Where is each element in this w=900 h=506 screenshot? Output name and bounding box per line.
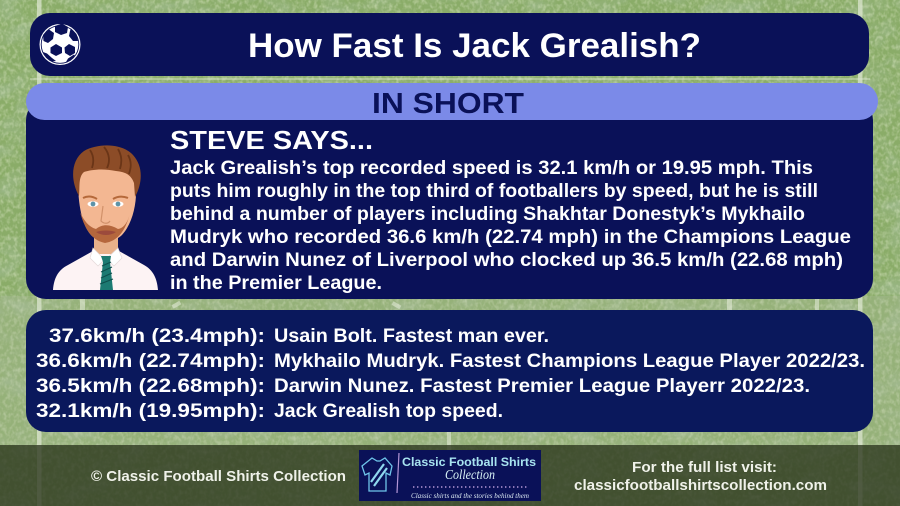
- row: Usain Bolt: Usain Bolt. Fastest man ever.: [274, 325, 549, 347]
- text block: summary paragraph: [170, 157, 851, 294]
- logo: Classic Football Shirts Collection: Collection: [445, 467, 495, 482]
- banner: in short: IN SHORT: [372, 88, 524, 120]
- text block: summary paragraph: and Darwin Nunez of Liverpool who clocked up 36.5 km/h (22.68 mph): [170, 249, 843, 271]
- row: Jack Grealish: 32.1km/h (19.95mph):: [36, 400, 265, 422]
- text block: summary paragraph: in the Premier League.: [170, 272, 382, 294]
- logo: Classic Football Shirts Collection: Classic Football Shirts: [402, 457, 536, 469]
- row: Mykhailo Mudryk: [36, 350, 865, 372]
- row: Mykhailo Mudryk: Mykhailo Mudryk. Fastest Champions League Player 2022/23.: [274, 350, 865, 372]
- panel: in short body: [26, 100, 873, 299]
- text block: summary paragraph: puts him roughly in the top third of footballers by speed, but he is still: [170, 180, 818, 202]
- row: Mykhailo Mudryk: 36.6km/h (22.74mph):: [36, 350, 265, 372]
- icon: football: [40, 24, 80, 65]
- footer: full list link: [574, 460, 827, 494]
- footer: copyright: © Classic Football Shirts Collection: [91, 468, 346, 485]
- row: Darwin Nunez: Darwin Nunez. Fastest Premier League Playerr 2022/23.: [274, 375, 810, 397]
- footer: full list link: For the full list visit:: [632, 460, 777, 476]
- panel: speed comparison list: [26, 310, 873, 432]
- title: How Fast Is Jack Grealish?: [248, 27, 701, 65]
- text block: summary paragraph: Mudryk who recorded 36.6 km/h (22.74 mph) in the Champions League: [170, 226, 851, 248]
- row: Jack Grealish: [36, 400, 503, 422]
- logo: Classic Football Shirts Collection: Classic shirts and the stories behind them: [411, 491, 530, 500]
- illustration: Steve avatar: [53, 145, 158, 290]
- logo: Classic Football Shirts Collection: [359, 450, 541, 501]
- heading: Steve says: STEVE SAYS...: [170, 125, 373, 155]
- row: Darwin Nunez: 36.5km/h (22.68mph):: [36, 375, 265, 397]
- row: Usain Bolt: 37.6km/h (23.4mph):: [49, 325, 265, 347]
- text block: summary paragraph: Jack Grealish’s top recorded speed is 32.1 km/h or 19.95 mph. This: [170, 157, 813, 179]
- footer band: [0, 445, 900, 506]
- banner: in short: [26, 83, 878, 120]
- row: Jack Grealish: Jack Grealish top speed.: [274, 400, 503, 422]
- row: Usain Bolt: [49, 325, 549, 347]
- text block: summary paragraph: behind a number of players including Shakhtar Donestyk’s Mykhailo: [170, 203, 805, 225]
- footer: full list link: classicfootballshirtscollection.com: [574, 478, 827, 494]
- panel: title bar: [30, 13, 869, 76]
- row: Darwin Nunez: [36, 375, 810, 397]
